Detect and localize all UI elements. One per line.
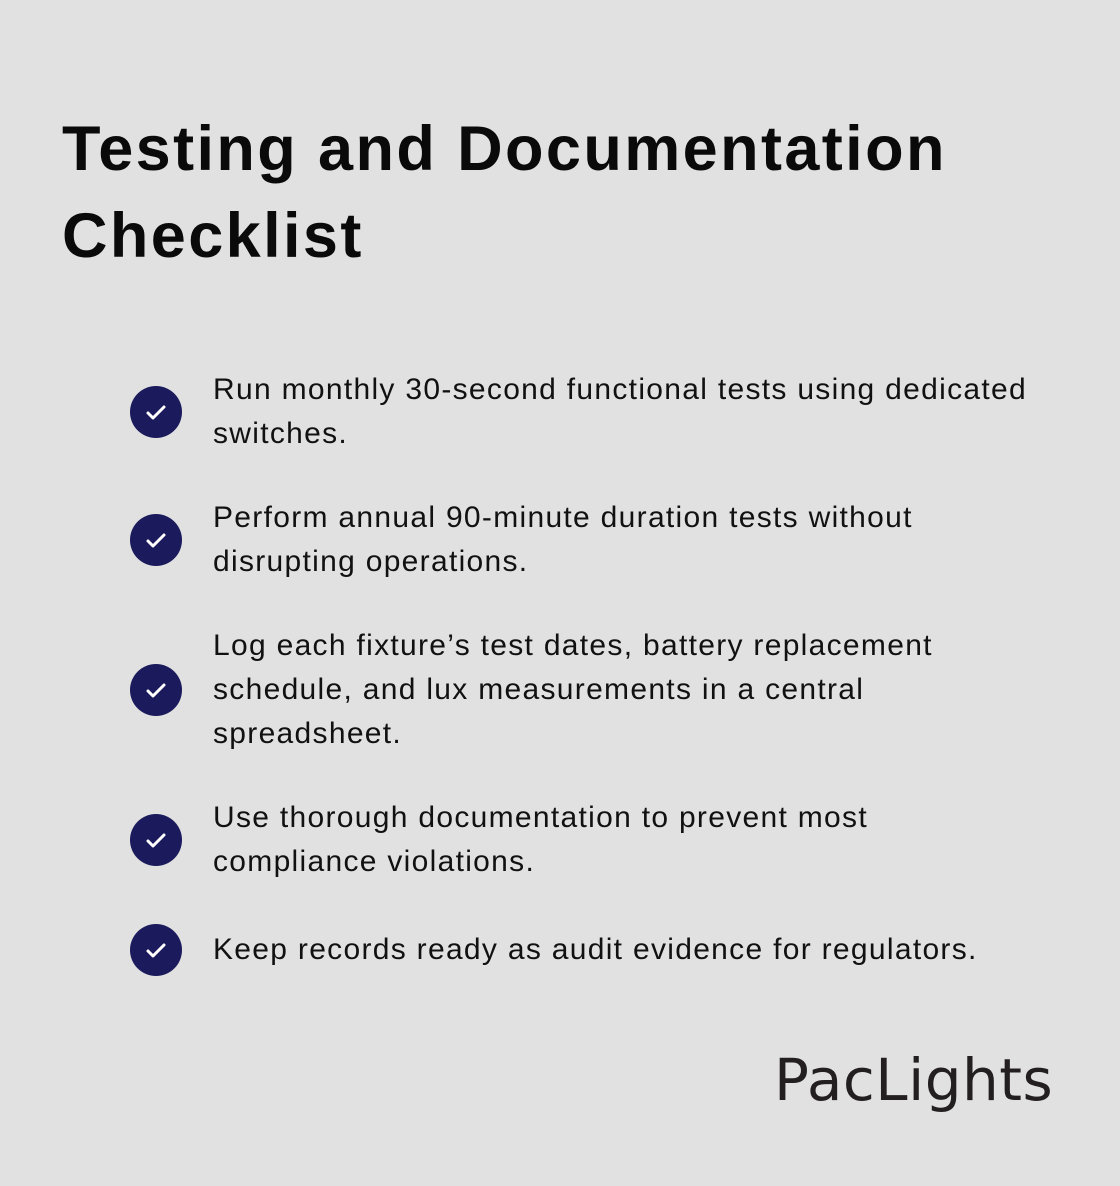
title <box>62 114 947 271</box>
icon: check 1 <box>130 386 182 438</box>
logo: PacLights <box>774 1046 1053 1114</box>
icon: check 3 <box>130 664 182 716</box>
icon: check 2 <box>130 514 182 566</box>
text 3: Log each fixture’s test dates, battery replacement schedule, and lux measurements in a central spreadsheet. <box>213 629 933 750</box>
text 2: Perform annual 90-minute duration tests without disrupting operations. <box>213 501 913 578</box>
item 1 <box>130 373 1027 450</box>
item 3 <box>130 629 933 750</box>
icon: check 4 <box>130 814 182 866</box>
item 5 <box>130 924 978 976</box>
item 4 <box>130 801 868 878</box>
title: Checklist <box>62 201 364 271</box>
text 1: Run monthly 30-second functional tests using dedicated switches. <box>213 373 1027 450</box>
item 2 <box>130 501 913 578</box>
text 4: Use thorough documentation to prevent most compliance violations. <box>213 801 868 878</box>
icon: check 5 <box>130 924 182 976</box>
title: Testing and Documentation <box>62 114 947 184</box>
text 5: Keep records ready as audit evidence for regulators. <box>213 933 978 966</box>
